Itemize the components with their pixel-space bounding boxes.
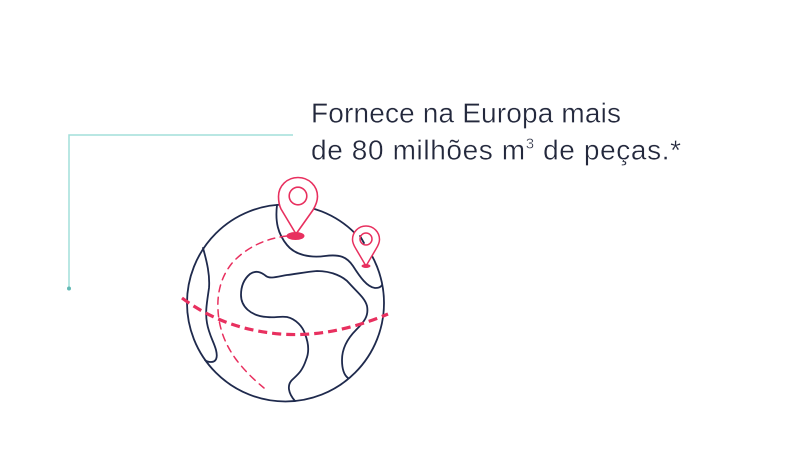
heading text: de 80 milhões m	[311, 134, 525, 166]
heading text: de peças.*	[535, 134, 681, 166]
heading text	[311, 98, 681, 166]
globe outline	[187, 204, 384, 402]
icon: small location pin	[352, 226, 380, 268]
globe illustration	[182, 178, 388, 402]
teal connector line with end dot	[67, 135, 293, 290]
thin dashed route	[218, 236, 287, 388]
continents	[203, 205, 382, 401]
heading text: Fornece na Europa mais	[311, 98, 621, 128]
icon: large location pin	[278, 178, 318, 240]
heading text: 3	[526, 136, 534, 152]
thick dashed equator	[182, 298, 388, 335]
